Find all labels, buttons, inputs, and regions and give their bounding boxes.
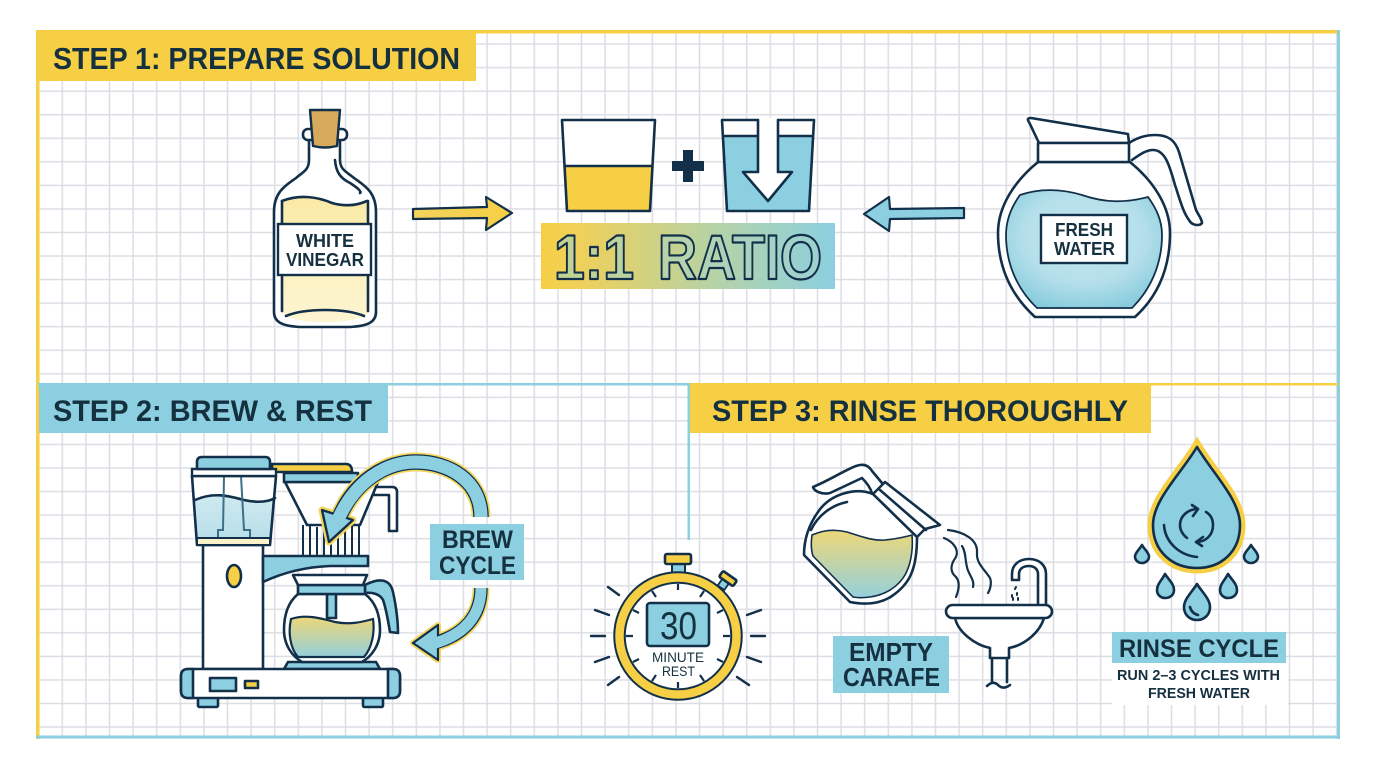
callout: 1:1 ratio: 1:1 (554, 223, 634, 293)
carafe label: WATER (1054, 238, 1115, 259)
heading: step 1 (36, 30, 476, 81)
glass carafe (284, 575, 398, 662)
filter handle (373, 487, 397, 531)
icon: fresh water carafe (998, 118, 1202, 317)
arrow: brew cycle bottom (413, 588, 481, 660)
icon: water streams (944, 530, 991, 597)
heading: step 1: STEP 1: PREPARE SOLUTION (53, 41, 460, 76)
text block: rinse instruction: FRESH WATER (1148, 686, 1251, 702)
machine base (181, 669, 400, 707)
carafe label: FRESH (1055, 219, 1113, 240)
callout: 1:1 ratio: RATIO (658, 223, 822, 293)
heading: step 2: STEP 2: BREW & REST (53, 395, 372, 428)
label: empty carafe: EMPTY (849, 637, 933, 667)
icon: stopwatch (591, 554, 765, 694)
icon: water drop with rinse cycle (1153, 447, 1240, 568)
icon: stopwatch: REST (662, 664, 695, 679)
icon: coffee machine (181, 457, 400, 707)
label: rinse cycle: RINSE CYCLE (1119, 635, 1279, 663)
arrow: vinegar to ratio (413, 197, 512, 230)
bottle label: WHITE (296, 230, 354, 251)
text block: rinse instruction (1112, 663, 1288, 705)
label: brew cycle (430, 524, 524, 580)
label: brew cycle: BREW (442, 526, 513, 554)
carafe label (1041, 215, 1127, 263)
rays (591, 587, 765, 685)
arrow: brew cycle top (322, 462, 481, 542)
label: empty carafe: CARAFE (843, 662, 940, 692)
timer display: 30 (660, 605, 697, 648)
heading: step 2 (39, 385, 388, 433)
dial ticks (626, 584, 730, 688)
icon: vinegar measure cup (562, 120, 655, 211)
label: empty carafe (833, 636, 949, 693)
heading: step 3: STEP 3: RINSE THOROUGHLY (712, 395, 1128, 428)
cork (310, 110, 340, 148)
icon: water measure cup (722, 118, 814, 211)
label: brew cycle: CYCLE (439, 552, 516, 580)
bottle label: VINEGAR (286, 249, 364, 270)
heading: step 3 (690, 385, 1151, 433)
timer display (647, 603, 709, 648)
text block: rinse instruction: RUN 2–3 CYCLES WITH (1117, 668, 1280, 684)
drip arm (263, 556, 368, 582)
drip lines (303, 525, 359, 556)
machine column (203, 545, 263, 669)
bottle label (278, 224, 371, 275)
callout: 1:1 ratio (541, 223, 835, 293)
icon: sink (946, 559, 1052, 688)
water tank (192, 457, 276, 545)
icon: small water drops (1135, 545, 1258, 620)
top arm (272, 464, 352, 472)
icon: plus (672, 150, 704, 182)
arrow: water to ratio (864, 197, 964, 231)
filter cone (285, 482, 378, 525)
icon: stopwatch: MINUTE (652, 650, 704, 665)
icon: white vinegar bottle (274, 110, 376, 327)
icon: pouring carafe (804, 465, 940, 604)
hot plate (284, 662, 380, 669)
